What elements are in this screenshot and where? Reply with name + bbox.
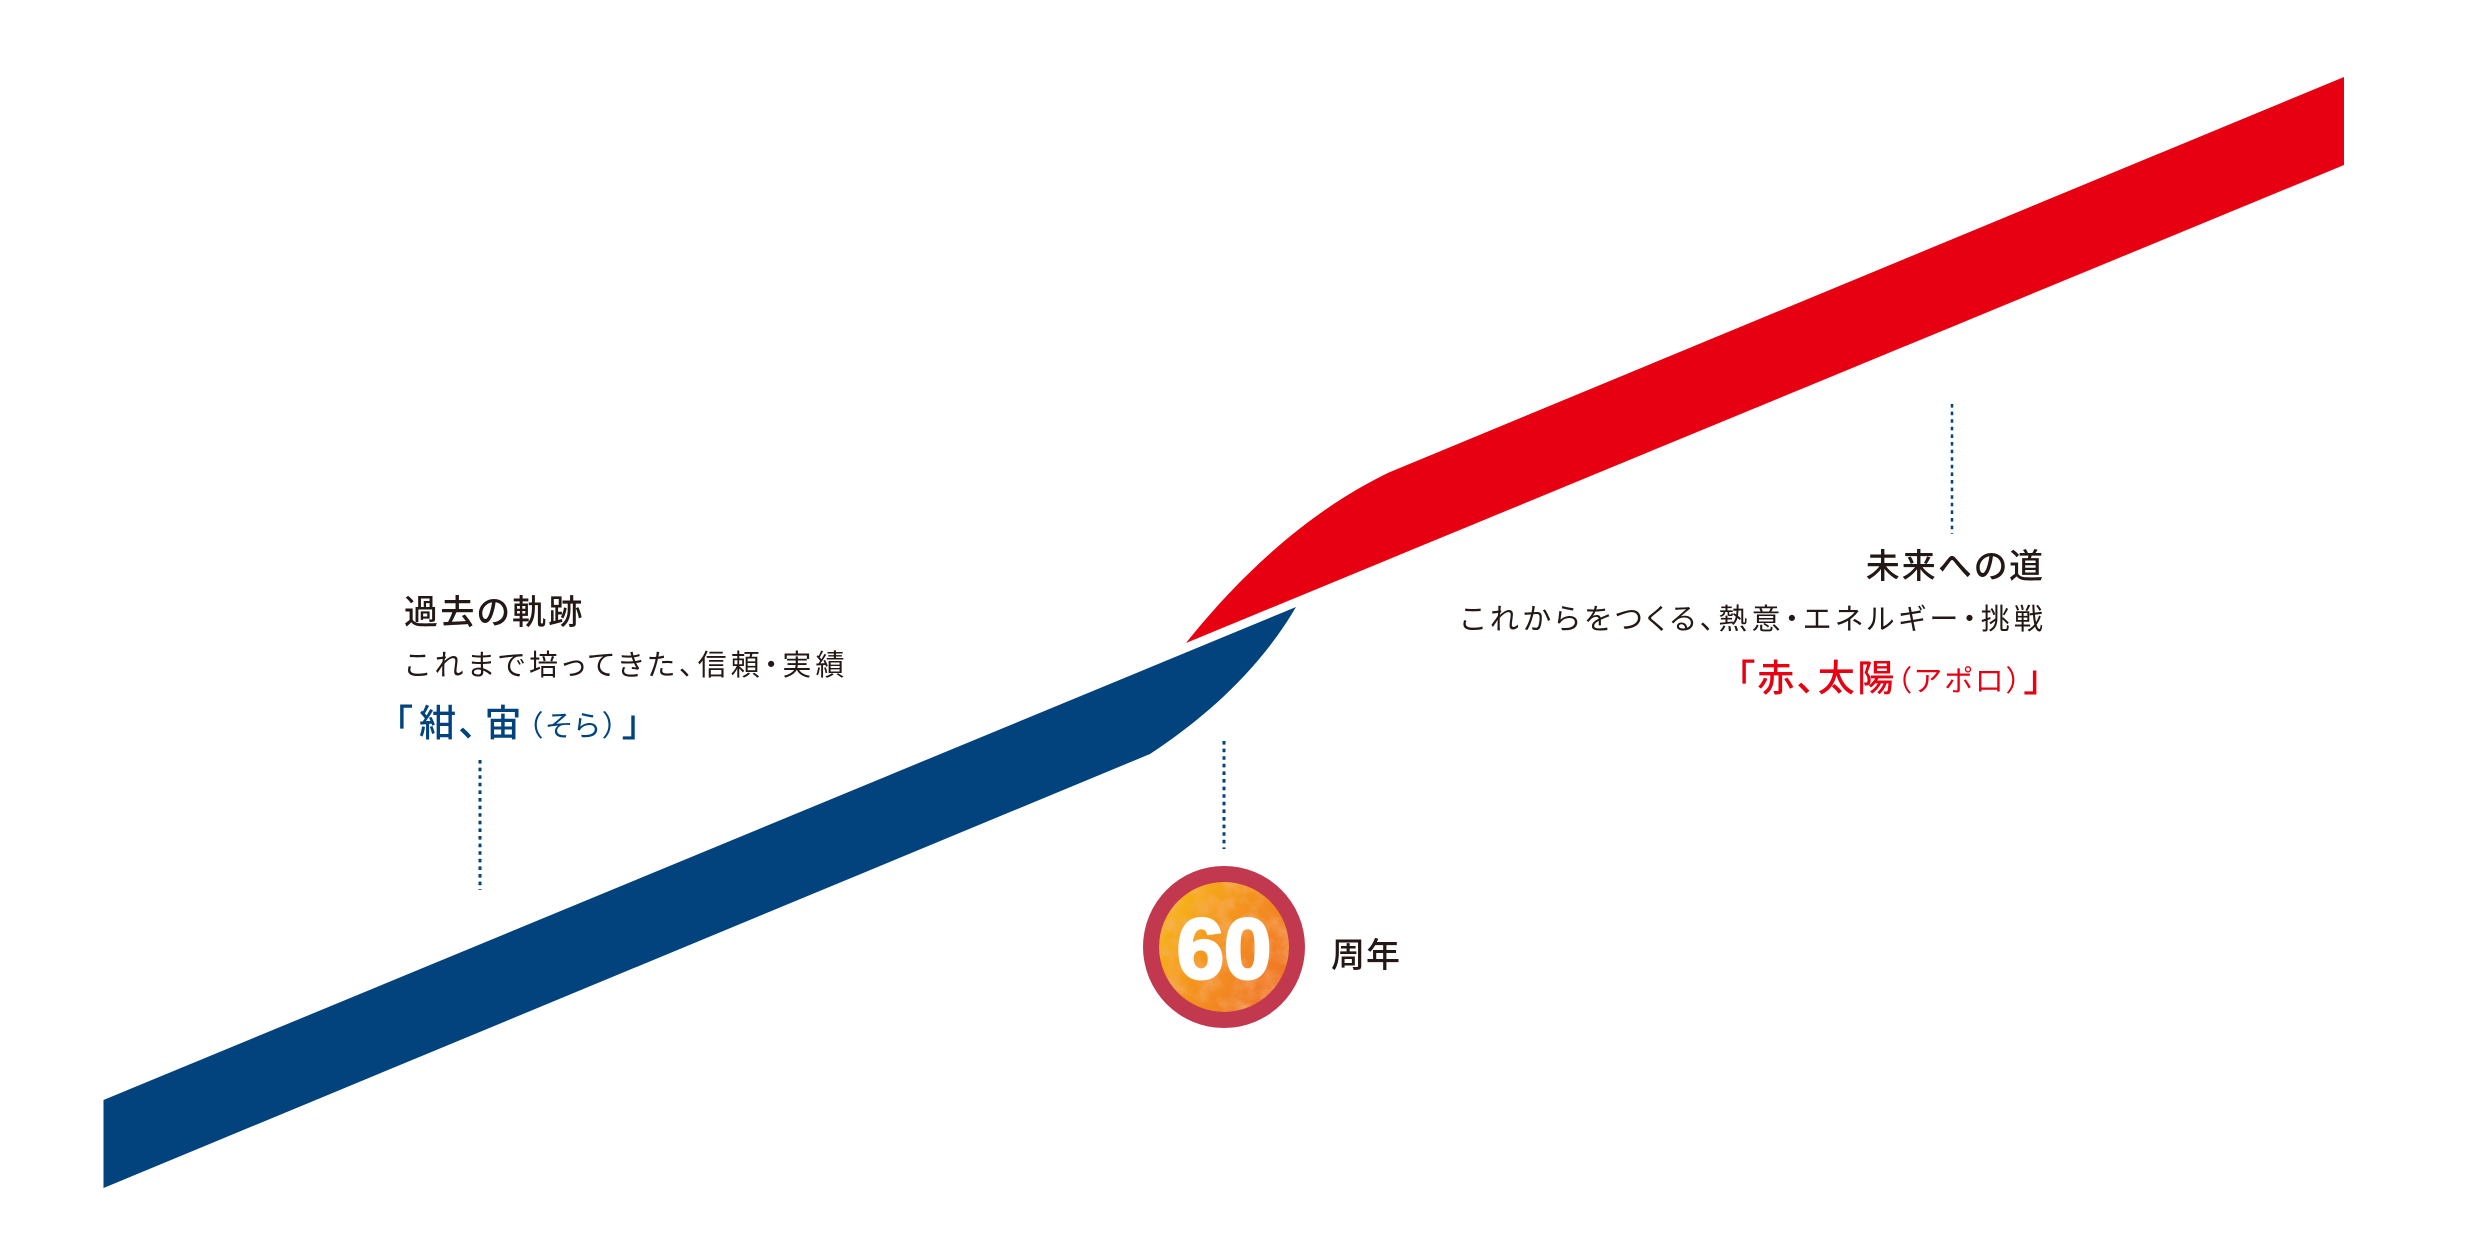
colour theme: red: 「赤、太陽（アポロ）」 <box>1736 658 2045 699</box>
dotted leader: past <box>478 760 482 890</box>
description: past: これまで培ってきた、信頼・実績 <box>405 649 849 682</box>
red ribbon: future <box>1186 77 2344 643</box>
text block: past <box>394 594 849 744</box>
badge number: 60 <box>1177 902 1271 997</box>
colour theme: navy: 「紺、宙（そら）」 <box>394 703 643 744</box>
anniversary label: 周年 <box>1331 937 1401 975</box>
navy ribbon: past <box>104 607 1296 1188</box>
badge ring <box>1143 866 1305 1028</box>
heading: future: 未来への道 <box>1866 548 2045 586</box>
dotted leader: future <box>1951 404 1953 534</box>
heading: past: 過去の軌跡 <box>404 594 585 632</box>
text block: future <box>1460 548 2047 699</box>
60th anniversary badge <box>1143 866 1305 1028</box>
description: future: これからをつくる、熱意・エネルギー・挑戦 <box>1460 603 2047 636</box>
badge watercolor disc <box>1159 882 1289 1012</box>
dotted leader: 60th anniversary <box>1222 741 1226 849</box>
